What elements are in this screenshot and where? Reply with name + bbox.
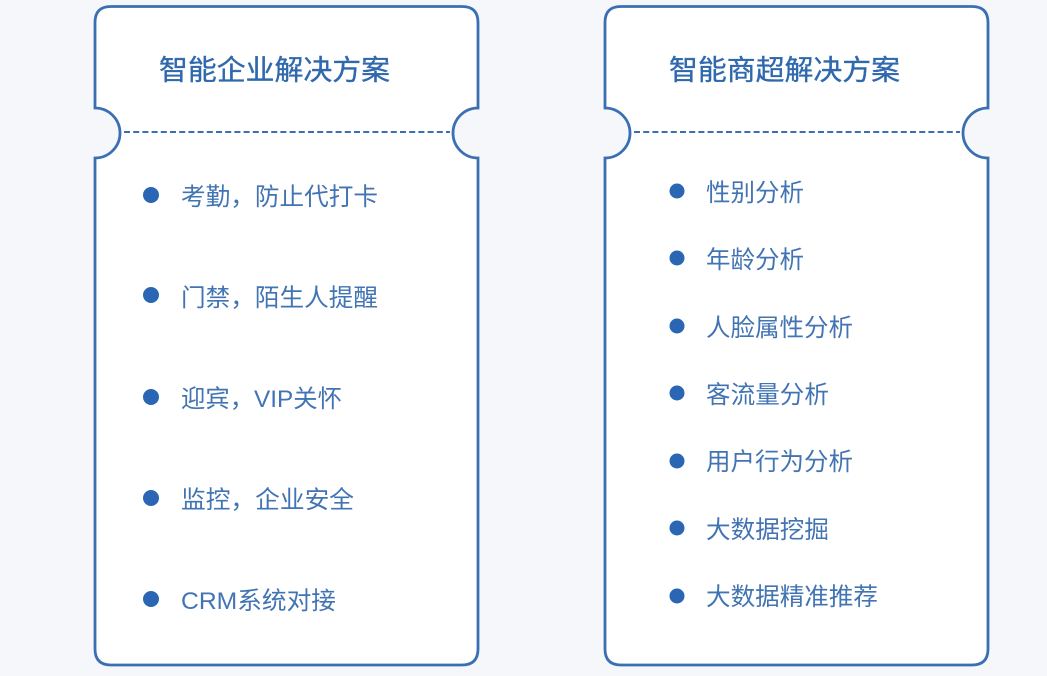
heading: smart enterprise solution: 智能企业解决方案 [159, 54, 390, 86]
list: retail features: 大数据挖掘 [706, 516, 829, 544]
list: retail features: 客流量分析 [706, 381, 829, 409]
panel outline: ticket shape [95, 6, 478, 665]
list: retail features: 大数据精准推荐 [706, 583, 878, 611]
list: retail features [670, 179, 878, 611]
list: enterprise features: CRM系统对接 [181, 587, 336, 615]
list: enterprise features: 监控，企业安全 [181, 486, 354, 514]
heading: smart retail solution: 智能商超解决方案 [669, 54, 900, 86]
list: enterprise features: 考勤，防止代打卡 [181, 183, 378, 211]
list: enterprise features [143, 183, 378, 615]
list: enterprise features: 门禁，陌生人提醒 [181, 284, 378, 312]
list: enterprise features: 迎宾，VIP关怀 [181, 385, 342, 413]
list: retail features: 用户行为分析 [706, 448, 853, 476]
panel: smart enterprise solution [95, 6, 478, 665]
panel outline: ticket shape [605, 6, 988, 665]
list: retail features: 性别分析 [706, 179, 804, 207]
list: retail features: 人脸属性分析 [706, 314, 853, 342]
panel: smart retail solution [605, 6, 988, 665]
list: retail features: 年龄分析 [706, 246, 804, 274]
